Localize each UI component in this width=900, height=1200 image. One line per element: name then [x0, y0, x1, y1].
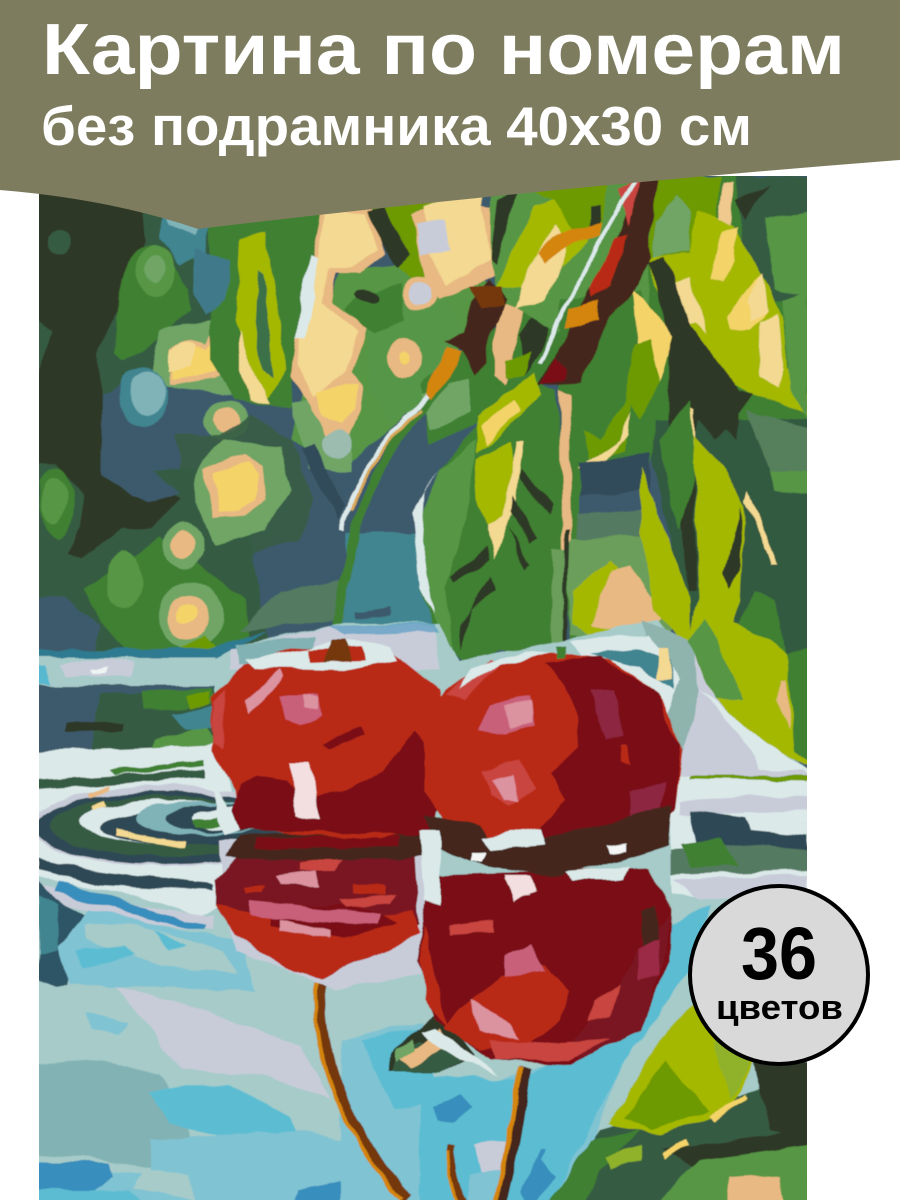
cherry reflection: left	[212, 825, 435, 990]
reflected stems	[315, 982, 525, 1200]
lower right leaves	[548, 1004, 807, 1200]
central leaf	[412, 372, 572, 665]
cherry: right	[425, 645, 682, 850]
background, centre	[160, 190, 580, 630]
background bokeh, left	[39, 194, 314, 652]
small reflected leaf	[389, 1012, 475, 1072]
badge: 36 colours: цветов	[716, 989, 843, 1027]
badge: 36 colours	[690, 886, 868, 1064]
subtitle: без подрамника 40х30 см	[41, 95, 752, 157]
stem: left cherry	[337, 385, 445, 650]
cherry: left	[210, 640, 448, 838]
mid leaf and gap	[558, 290, 778, 640]
painting: cherries over water	[10, 160, 840, 1200]
water	[20, 580, 830, 1200]
branch	[425, 176, 660, 400]
header banner	[0, 0, 900, 229]
dark waterline between cherries and reflections	[420, 805, 672, 905]
leaves and upper foliage, right	[489, 176, 807, 656]
badge: 36 colours: 36	[741, 912, 817, 995]
title: Картина по номерам	[42, 10, 845, 90]
cherry reflection: right	[418, 868, 672, 1075]
